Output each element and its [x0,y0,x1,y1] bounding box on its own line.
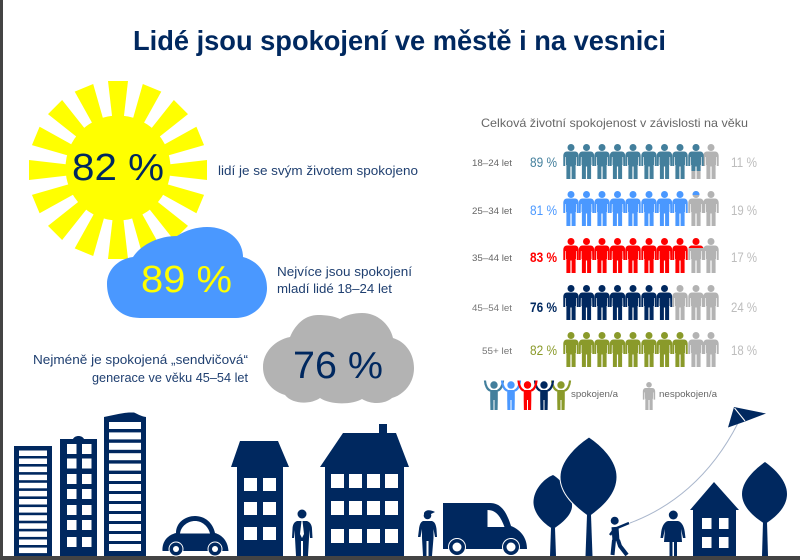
child with kite [610,407,766,555]
row: 45–54: 76 % [530,299,557,315]
text: youngest most satisfied [277,264,412,296]
legend [485,380,718,410]
tower with stripes [14,446,52,556]
row: 35–44 [472,238,757,273]
row: 35–44: 83 % [530,249,557,265]
title: Lidé jsou spokojení ve městě i na vesnici [133,25,666,56]
text: sandwich generation least satisfied: generace ve věku 45–54 let [92,370,248,385]
row: 35–44: 17 % [731,249,757,265]
icon: blue cloud with 89 %: 89 % [141,259,232,301]
row: 35–44: 35–44 let [472,253,512,264]
row: 25–34: 81 % [530,202,557,218]
small tree [533,475,572,556]
row: 55+ [482,332,757,367]
row: 18–24: 89 % [530,154,557,170]
big house [320,424,409,556]
pictogram chart: satisfaction by age [472,144,757,367]
tall tower [104,412,146,556]
row: 18–24 [472,144,757,179]
row: 55+: 82 % [530,342,557,358]
row: 25–34: 25–34 let [472,206,512,217]
icon: grey cloud with 76 % [263,313,414,403]
row: 55+: 18 % [731,342,757,358]
row: 45–54 [472,285,757,320]
text: youngest most satisfied: mladí lidé 18–24 let [277,281,392,296]
row: 25–34: 19 % [731,202,757,218]
chart heading: Celková životní spokojenost v závislosti na věku [481,116,748,130]
man with tie [292,510,312,556]
text: youngest most satisfied: Nejvíce jsou spokojení [277,264,412,279]
woman [660,510,686,556]
row: 25–34 [472,191,757,226]
legend: not satisfied: nespokojen/a [659,389,718,400]
small house [690,482,739,556]
legend: not satisfied [643,382,718,410]
row: 45–54: 45–54 let [472,303,512,314]
row: 18–24: 11 % [731,154,757,170]
icon: sun with 82 % [29,81,207,259]
legend: satisfied: spokojen/a [571,389,619,400]
delivery van [443,503,527,556]
right tree [742,462,787,556]
row: 55+: 55+ let [482,346,512,357]
legend: satisfied [485,380,619,410]
tall house [231,441,289,556]
icon: sun with 82 %: 82 % [72,147,164,189]
illustration: townscape [14,407,787,556]
icon: grey cloud with 76 %: 76 % [293,345,383,387]
tower with windows [60,436,97,556]
car [162,516,228,556]
large tree [560,437,617,556]
icon: blue cloud with 89 % [107,227,267,318]
text: sandwich generation least satisfied [33,352,248,385]
text: overall satisfaction: lidí je se svým životem spokojeno [218,163,418,178]
row: 18–24: 18–24 let [472,158,512,169]
row: 45–54: 24 % [731,299,757,315]
text: sandwich generation least satisfied: Nejméně je spokojená „sendvičová“ [33,352,248,367]
delivery person [418,510,437,556]
